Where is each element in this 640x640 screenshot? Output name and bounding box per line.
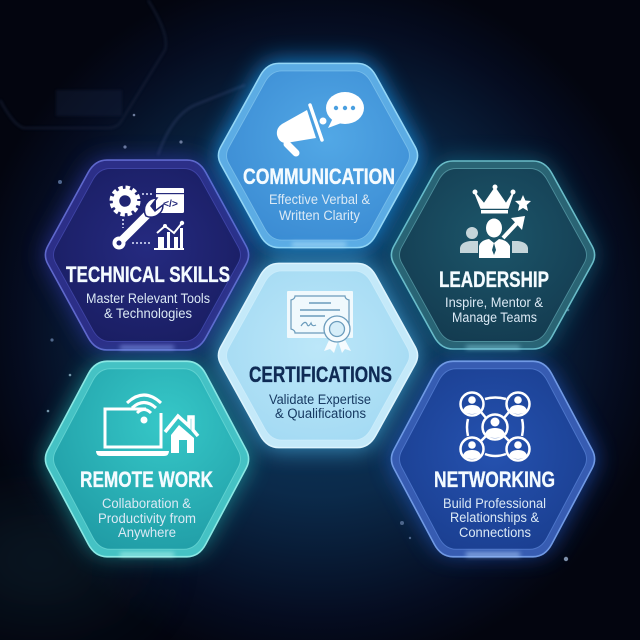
panel: remote work — [45, 361, 249, 557]
text: networking description: Relationships & — [450, 510, 539, 525]
text: networking description — [443, 496, 546, 540]
text: certifications description: & Qualifications — [275, 406, 366, 421]
icon: megaphone and speech bubble — [277, 92, 364, 153]
text: networking description: Connections — [459, 525, 531, 540]
text: communication description: Effective Verbal & — [269, 192, 370, 207]
text: leadership description: Manage Teams — [452, 310, 537, 325]
panel: leadership — [391, 161, 595, 349]
text: certifications description: Validate Expertise — [269, 392, 371, 407]
heading: communication: COMMUNICATION — [243, 164, 395, 189]
text: networking description: Build Professional — [443, 496, 546, 511]
heading: networking: NETWORKING — [434, 467, 555, 492]
text: remote work description — [98, 496, 196, 540]
icon: tools, code window and chart — [112, 188, 184, 250]
panel: communication — [216, 61, 420, 249]
text: remote work description: Collaboration & — [102, 496, 191, 511]
text: remote work description: Productivity from — [98, 511, 196, 526]
text: communication description — [269, 192, 370, 223]
text: remote work description: Anywhere — [118, 525, 176, 540]
icon: laptop, wifi and home — [96, 395, 198, 456]
text: certifications description — [269, 392, 371, 421]
text: leadership description — [445, 295, 543, 325]
icon: people network — [460, 392, 530, 460]
text: technical skills description: Master Relevant Tools — [86, 291, 210, 306]
icon: crown, team and arrow — [460, 184, 531, 258]
panel: networking — [391, 361, 595, 557]
icon: tools, code window and chart: </> — [163, 199, 178, 210]
text: leadership description: Inspire, Mentor & — [445, 295, 543, 310]
icon: certificate with seal — [287, 291, 353, 353]
heading: leadership: LEADERSHIP — [439, 267, 549, 292]
text: technical skills description: & Technologies — [104, 306, 192, 321]
heading: remote work: REMOTE WORK — [80, 467, 213, 492]
text: communication description: Written Clarity — [279, 208, 360, 223]
panel: certifications — [216, 261, 420, 449]
heading: technical skills: TECHNICAL SKILLS — [66, 262, 230, 287]
text: technical skills description — [86, 291, 210, 321]
heading: certifications: CERTIFICATIONS — [249, 362, 392, 387]
panel: technical skills — [45, 160, 249, 350]
